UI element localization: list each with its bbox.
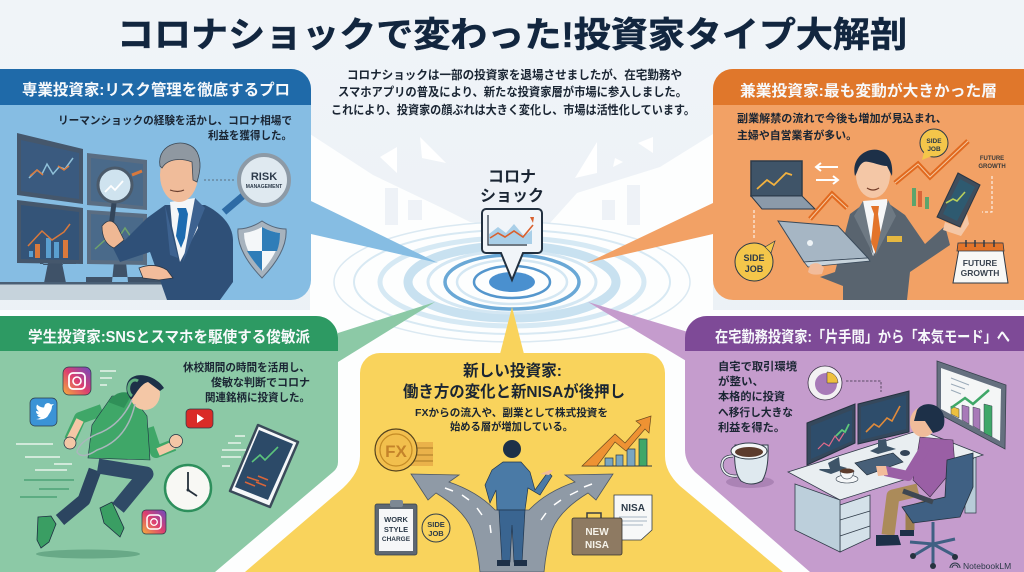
callout: side job <box>422 514 450 542</box>
desk and drawers <box>788 430 983 552</box>
icon: clock <box>165 465 211 511</box>
icon: NISA document <box>614 495 652 540</box>
icon: small laptop <box>751 161 815 209</box>
heading: 新しい投資家: <box>463 361 562 380</box>
text block: FXからの流入や、副業として株式投資を <box>415 406 608 419</box>
label: future growth: GROWTH <box>978 164 1006 170</box>
panel: professional investor <box>0 69 311 300</box>
icon: tablet <box>937 173 980 236</box>
icon: work style clipboard: STYLE <box>384 525 408 534</box>
figure: remote worker at chair <box>876 404 973 569</box>
text block: 俊敏な判断でコロナ <box>211 375 310 389</box>
title: コロナショックで変わった!投資家タイプ大解剖 <box>117 16 907 55</box>
NotebookLM mark: NotebookLM <box>963 561 1011 571</box>
pointer: blue <box>311 201 438 263</box>
heading: 兼業投資家:最も変動が大きかった層 <box>740 81 997 100</box>
text block: 自宅で取引環境 <box>718 359 797 373</box>
pointer: purple <box>588 302 688 362</box>
icon: monitors <box>17 133 196 283</box>
icon: shield <box>238 221 286 278</box>
icon: NISA document: NISA <box>621 503 645 514</box>
figure: man at crossroads <box>485 440 553 566</box>
text block: が整い、 <box>718 374 764 388</box>
heading: 学生投資家:SNSとスマホを駆使する俊敏派 <box>28 327 310 346</box>
growth line <box>810 141 968 219</box>
icon: calendar <box>953 240 1008 283</box>
intro text: これにより、投資家の顔ぶれは大きく変化し、市場は活性化しています。 <box>331 102 695 117</box>
heading <box>403 361 625 401</box>
icon: twitter <box>30 398 57 426</box>
pointer: yellow <box>500 307 524 354</box>
callout: side job top <box>920 129 948 160</box>
callout: side job: SIDE <box>427 520 445 529</box>
label: future growth <box>754 156 1006 238</box>
text block: リーマンショックの経験を活かし、コロナ相場で <box>58 113 292 127</box>
ripple rings: corona shock epicentre <box>334 222 690 342</box>
callout: side job top: SIDE <box>926 138 942 145</box>
icon: magnifying glass <box>98 168 132 248</box>
icon: chart speech bubble <box>482 209 542 280</box>
icon: youtube <box>186 409 213 428</box>
heading: 専業投資家:リスク管理を徹底するプロ <box>22 80 290 99</box>
text block: 主婦や自営業者が多い。 <box>737 128 857 142</box>
icon: keyboard and small cup <box>836 450 910 483</box>
icon: FX coins <box>375 429 433 471</box>
heading: 働き方の変化と新NISAが後押し <box>403 382 625 401</box>
icon: calendar: GROWTH <box>961 268 999 278</box>
text block: 本格的に投資 <box>718 389 785 403</box>
icon: smartphone <box>230 425 298 507</box>
icon: growth chart <box>582 416 652 466</box>
intro text: コロナショックは一部の投資家を退場させましたが、在宅勤務や <box>347 67 682 82</box>
intro text: スマホアプリの普及により、新たな投資家層が市場に参入しました。 <box>338 84 687 99</box>
callout: side job top: JOB <box>927 146 941 153</box>
icon: instagram small <box>142 510 166 534</box>
icon: pie chart <box>808 366 881 400</box>
icon: work style clipboard: CHARGE <box>382 536 411 543</box>
intro text <box>331 67 695 117</box>
text block: へ移行し大きな <box>718 405 793 419</box>
text block: 休校期間の時間を活用し、 <box>183 360 310 374</box>
callout: side job bottom: SIDE <box>743 253 765 263</box>
icon: risk management lens: RISK <box>251 171 277 183</box>
text block <box>718 359 797 434</box>
icon: forked road <box>411 474 613 572</box>
callout: side job: JOB <box>428 529 444 538</box>
centre label <box>480 169 544 205</box>
icon: open laptop <box>778 221 870 275</box>
text block <box>415 406 608 433</box>
icon: transfer arrows <box>816 163 838 184</box>
text block <box>183 360 310 404</box>
text block: 利益を得た。 <box>718 420 785 434</box>
text block: 始める層が増加している。 <box>450 420 573 433</box>
pointer: green <box>338 302 435 362</box>
icon: wall chart <box>937 361 1006 449</box>
text block: 副業解禁の流れで今後も増加が見込まれ、 <box>737 111 947 125</box>
icon: new NISA briefcase: NISA <box>585 540 609 551</box>
icon: FX coins: FX <box>385 442 408 461</box>
icon: risk management lens <box>204 155 289 212</box>
icon: work style clipboard <box>375 500 417 555</box>
icon: calendar: FUTURE <box>963 258 998 268</box>
pointer: orange <box>587 203 713 263</box>
label: future growth: FUTURE <box>980 156 1004 162</box>
icon: dual monitors <box>807 391 909 474</box>
icon: instagram <box>63 367 91 395</box>
text block: 利益を獲得した。 <box>208 128 292 142</box>
icon: risk management lens: MANAGEMENT <box>246 184 282 190</box>
text block <box>737 111 947 142</box>
centre label: コロナ <box>488 169 536 186</box>
figure: professional man <box>113 143 233 300</box>
callout: side job bottom <box>735 241 775 281</box>
icon: work style clipboard: WORK <box>384 515 408 524</box>
icon: coffee mug <box>722 443 774 488</box>
panel: remote-work investor <box>685 316 1024 572</box>
figure: running student <box>36 375 182 558</box>
panel: new investor <box>245 353 783 572</box>
figure: side-job man <box>820 150 950 300</box>
panel: side-job investor <box>713 69 1024 300</box>
icon: new NISA briefcase <box>572 513 622 555</box>
speed lines <box>16 371 246 497</box>
callout: side job bottom: JOB <box>745 264 764 274</box>
text block <box>58 113 292 142</box>
panel: student investor <box>0 316 338 572</box>
desk <box>0 284 167 300</box>
icon: new NISA briefcase: NEW <box>585 527 609 538</box>
text block: 関連銘柄に投資した。 <box>205 390 310 404</box>
centre label: ショック <box>480 187 544 205</box>
